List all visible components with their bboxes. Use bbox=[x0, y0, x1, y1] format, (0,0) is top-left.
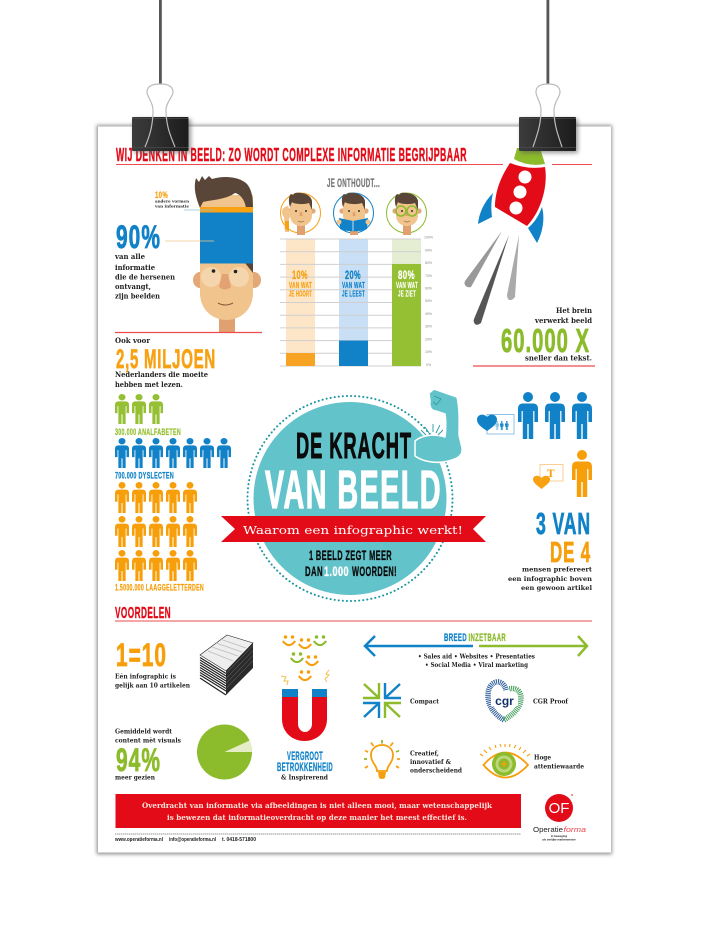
text: 94 percent more views bbox=[115, 728, 181, 782]
text: breed inzetbaar: • Social Media • Viral marketing bbox=[425, 661, 528, 669]
bar chart: remembering: 40% bbox=[425, 312, 432, 316]
bar chart: remembering: 50% bbox=[425, 299, 432, 303]
text: 3 van de 4: een gewoon artikel bbox=[521, 584, 593, 592]
text: 10 percent other forms: van informatie bbox=[154, 204, 189, 208]
pie chart: 94 percent bbox=[197, 724, 252, 780]
text: 2,5 miljoen: Nederlanders die moeite bbox=[115, 370, 209, 379]
bar chart: remembering: JE ZIET bbox=[398, 290, 416, 298]
bar chart: remembering: 80% bbox=[425, 261, 432, 265]
text: brain processes images faster: sneller dan tekst. bbox=[525, 354, 592, 362]
text: 94 percent more views: 94% bbox=[116, 742, 161, 778]
pictogram: dyslecten: 700.000 DYSLECTEN bbox=[115, 470, 174, 482]
clip: left binder clip bbox=[132, 0, 191, 153]
text: 2,5 miljoen: hebben met lezen. bbox=[115, 380, 183, 389]
icon: compact arrows bbox=[363, 683, 401, 718]
text: 1=10: gelijk aan 10 artikelen bbox=[115, 682, 190, 690]
text: 1=10 bbox=[115, 637, 190, 690]
callout: red conclusion banner: is bewezen dat informatieoverdracht op deze manier het meest effectief is. bbox=[167, 813, 467, 822]
arrow: breed inzetbaar bbox=[365, 636, 587, 656]
illustration: rocket bbox=[464, 148, 546, 325]
text: brain processes images faster: verwerkt beeld bbox=[534, 316, 592, 325]
bar chart: remembering: 10% bbox=[292, 270, 308, 282]
bar chart: remembering: 0% bbox=[426, 363, 431, 367]
bar chart: remembering bbox=[280, 236, 433, 367]
icon: light bulb bbox=[364, 740, 400, 779]
icon: reading man bbox=[334, 193, 374, 235]
text: 3 van de 4: mensen prefereert bbox=[522, 566, 592, 574]
text: 2,5 miljoen: Ook voor bbox=[115, 336, 150, 345]
bar chart: remembering: 20% bbox=[345, 270, 361, 282]
illustration: head with 90 percent brain bbox=[165, 176, 261, 332]
central badge: de kracht van beeld: 1 BEELD ZEGT MEER bbox=[309, 547, 392, 563]
central badge: de kracht van beeld: VAN BEELD bbox=[265, 460, 442, 520]
logo: operatie forma: in beweging bbox=[551, 834, 567, 838]
text: hoge attentiewaarde bbox=[534, 754, 584, 770]
bar chart: remembering: 30% bbox=[425, 324, 432, 328]
footer contact: t. 0418-571800 bbox=[222, 837, 256, 843]
pictogram: laaggeletterden: 1.5000.000 LAAGGELETTERDEN bbox=[115, 582, 204, 594]
icon: smileys bbox=[281, 635, 329, 685]
bar chart: remembering: 90% bbox=[425, 248, 432, 252]
icon: cgr logo: cgr bbox=[495, 694, 514, 708]
text: compact: Compact bbox=[410, 698, 439, 706]
bar chart: remembering: JE HOORT bbox=[289, 290, 312, 298]
text: 94 percent more views: Gemiddeld wordt bbox=[115, 728, 172, 736]
central badge: de kracht van beeld: Waarom een infographic werkt! bbox=[243, 524, 463, 537]
callout: red conclusion banner: Overdracht van informatie via afbeeldingen is niet alleen mooi, maar wetenschappelijk bbox=[142, 801, 492, 810]
callout: red conclusion banner bbox=[116, 794, 521, 828]
text: 3 van de 4 bbox=[508, 506, 593, 592]
text: 3 van de 4: 3 VAN bbox=[536, 506, 591, 541]
heading: voordelen: VOORDELEN bbox=[115, 605, 171, 622]
text: 10 percent other forms: andere vormen bbox=[155, 198, 189, 204]
bar chart: remembering: JE LEEST bbox=[342, 290, 365, 298]
text: 90 percent of information: 90% bbox=[116, 219, 161, 255]
bar chart: remembering: 60% bbox=[425, 286, 432, 290]
pictogram: laaggeletterden bbox=[115, 482, 204, 594]
heading: je onthoudt: JE ONTHOUDT... bbox=[327, 176, 380, 190]
footer contact: www.operatieforma.nl bbox=[114, 837, 164, 843]
text: creatief bbox=[410, 750, 462, 774]
bar chart: remembering: 10% bbox=[425, 350, 432, 354]
logo: operatie forma: Operatie bbox=[533, 825, 563, 834]
text: 90 percent of information bbox=[114, 219, 175, 300]
icon: stack of articles bbox=[200, 635, 253, 695]
central badge: de kracht van beeld: 1.000 bbox=[324, 563, 349, 579]
central badge: de kracht van beeld bbox=[221, 389, 486, 601]
logo: operatie forma: OF bbox=[549, 800, 569, 817]
icon: listening man bbox=[280, 193, 320, 235]
text: 90 percent of information: ontvangt, bbox=[115, 282, 151, 291]
pictogram: analfabeten: 300.000 ANALFABETEN bbox=[115, 427, 181, 438]
text: brain processes images faster: 60.000 X bbox=[501, 322, 590, 359]
icon: flexed arm bbox=[415, 389, 462, 462]
text: vergroot betrokkenheid: & Inspirerend bbox=[281, 774, 328, 782]
text: 1=10: 1=10 bbox=[116, 637, 167, 673]
logo: operatie forma: forma bbox=[564, 825, 586, 834]
poster sheet bbox=[96, 125, 612, 854]
text: breed inzetbaar: BREED bbox=[444, 632, 467, 644]
text: 2,5 miljoen: 2,5 MILJOEN bbox=[116, 344, 216, 374]
text: creatief: Creatief, bbox=[410, 750, 439, 758]
icon: cgr logo bbox=[488, 682, 521, 720]
central badge: de kracht van beeld: WOORDEN! bbox=[352, 563, 397, 579]
text: creatief: innovatief & bbox=[410, 758, 451, 766]
bar chart: remembering: VAN WAT bbox=[289, 281, 312, 290]
text: 94 percent more views: meer gezien bbox=[115, 774, 155, 782]
pictogram: three prefer infographic bbox=[477, 392, 592, 439]
central badge: de kracht van beeld: DAN bbox=[305, 563, 323, 579]
text: 94 percent more views: content mèt visuals bbox=[115, 736, 181, 744]
text: 2,5 miljoen bbox=[115, 336, 216, 389]
text: 90 percent of information: informatie bbox=[115, 263, 156, 272]
text: vergroot betrokkenheid: BETROKKENHEID bbox=[277, 762, 333, 774]
text: hoge attentiewaarde: Hoge bbox=[534, 754, 551, 762]
text: breed inzetbaar: • Sales aid • Websites • Presentaties bbox=[418, 652, 535, 660]
logo: operatie forma: als eerlijke marktmeester bbox=[542, 838, 577, 842]
pictogram: one prefers text: T bbox=[547, 469, 555, 480]
text: 3 van de 4: een infographic boven bbox=[508, 575, 592, 583]
text: breed inzetbaar bbox=[418, 632, 535, 669]
text: 10 percent other forms bbox=[154, 190, 189, 208]
footer contact: info@operatieforma.nl bbox=[169, 837, 217, 843]
bar chart: remembering: 20% bbox=[425, 338, 432, 342]
text: 90 percent of information: die de hersenen bbox=[115, 272, 175, 282]
text: brain processes images faster: Het brein bbox=[556, 306, 592, 315]
pictogram: dyslecten bbox=[115, 438, 231, 482]
central badge: de kracht van beeld: DE KRACHT bbox=[296, 425, 412, 466]
text: cgr proof: CGR Proof bbox=[533, 698, 569, 706]
text: vergroot betrokkenheid bbox=[277, 751, 333, 782]
footer contact bbox=[114, 837, 256, 843]
text: 90 percent of information: zijn beelden bbox=[115, 292, 160, 300]
bar chart: remembering: VAN WAT bbox=[342, 281, 365, 290]
icon: magnet bbox=[282, 689, 327, 741]
clip: right binder clip bbox=[519, 0, 578, 153]
bar chart: remembering: 80% bbox=[398, 270, 415, 282]
icon: man with glasses bbox=[386, 193, 426, 235]
text: brain processes images faster bbox=[473, 306, 595, 366]
bar chart: remembering: 70% bbox=[425, 274, 432, 278]
icon: eye bbox=[480, 744, 530, 778]
pictogram: one prefers text bbox=[533, 450, 592, 497]
text: breed inzetbaar: INZETBAAR bbox=[468, 632, 506, 644]
text: 10 percent other forms: 10% bbox=[155, 190, 168, 201]
bar chart: remembering: VAN WAT bbox=[396, 281, 418, 290]
text: 1=10: Eén infographic is bbox=[115, 672, 176, 680]
bar chart: remembering: 100% bbox=[424, 236, 433, 240]
logo: operatie forma bbox=[533, 794, 586, 842]
text: 90 percent of information: van alle bbox=[114, 252, 146, 261]
text: vergroot betrokkenheid: VERGROOT bbox=[287, 751, 323, 763]
pictogram: analfabeten bbox=[115, 394, 181, 438]
text: hoge attentiewaarde: attentiewaarde bbox=[534, 762, 584, 770]
text: 3 van de 4: DE 4 bbox=[550, 537, 591, 569]
text: creatief: onderscheidend bbox=[410, 766, 462, 774]
